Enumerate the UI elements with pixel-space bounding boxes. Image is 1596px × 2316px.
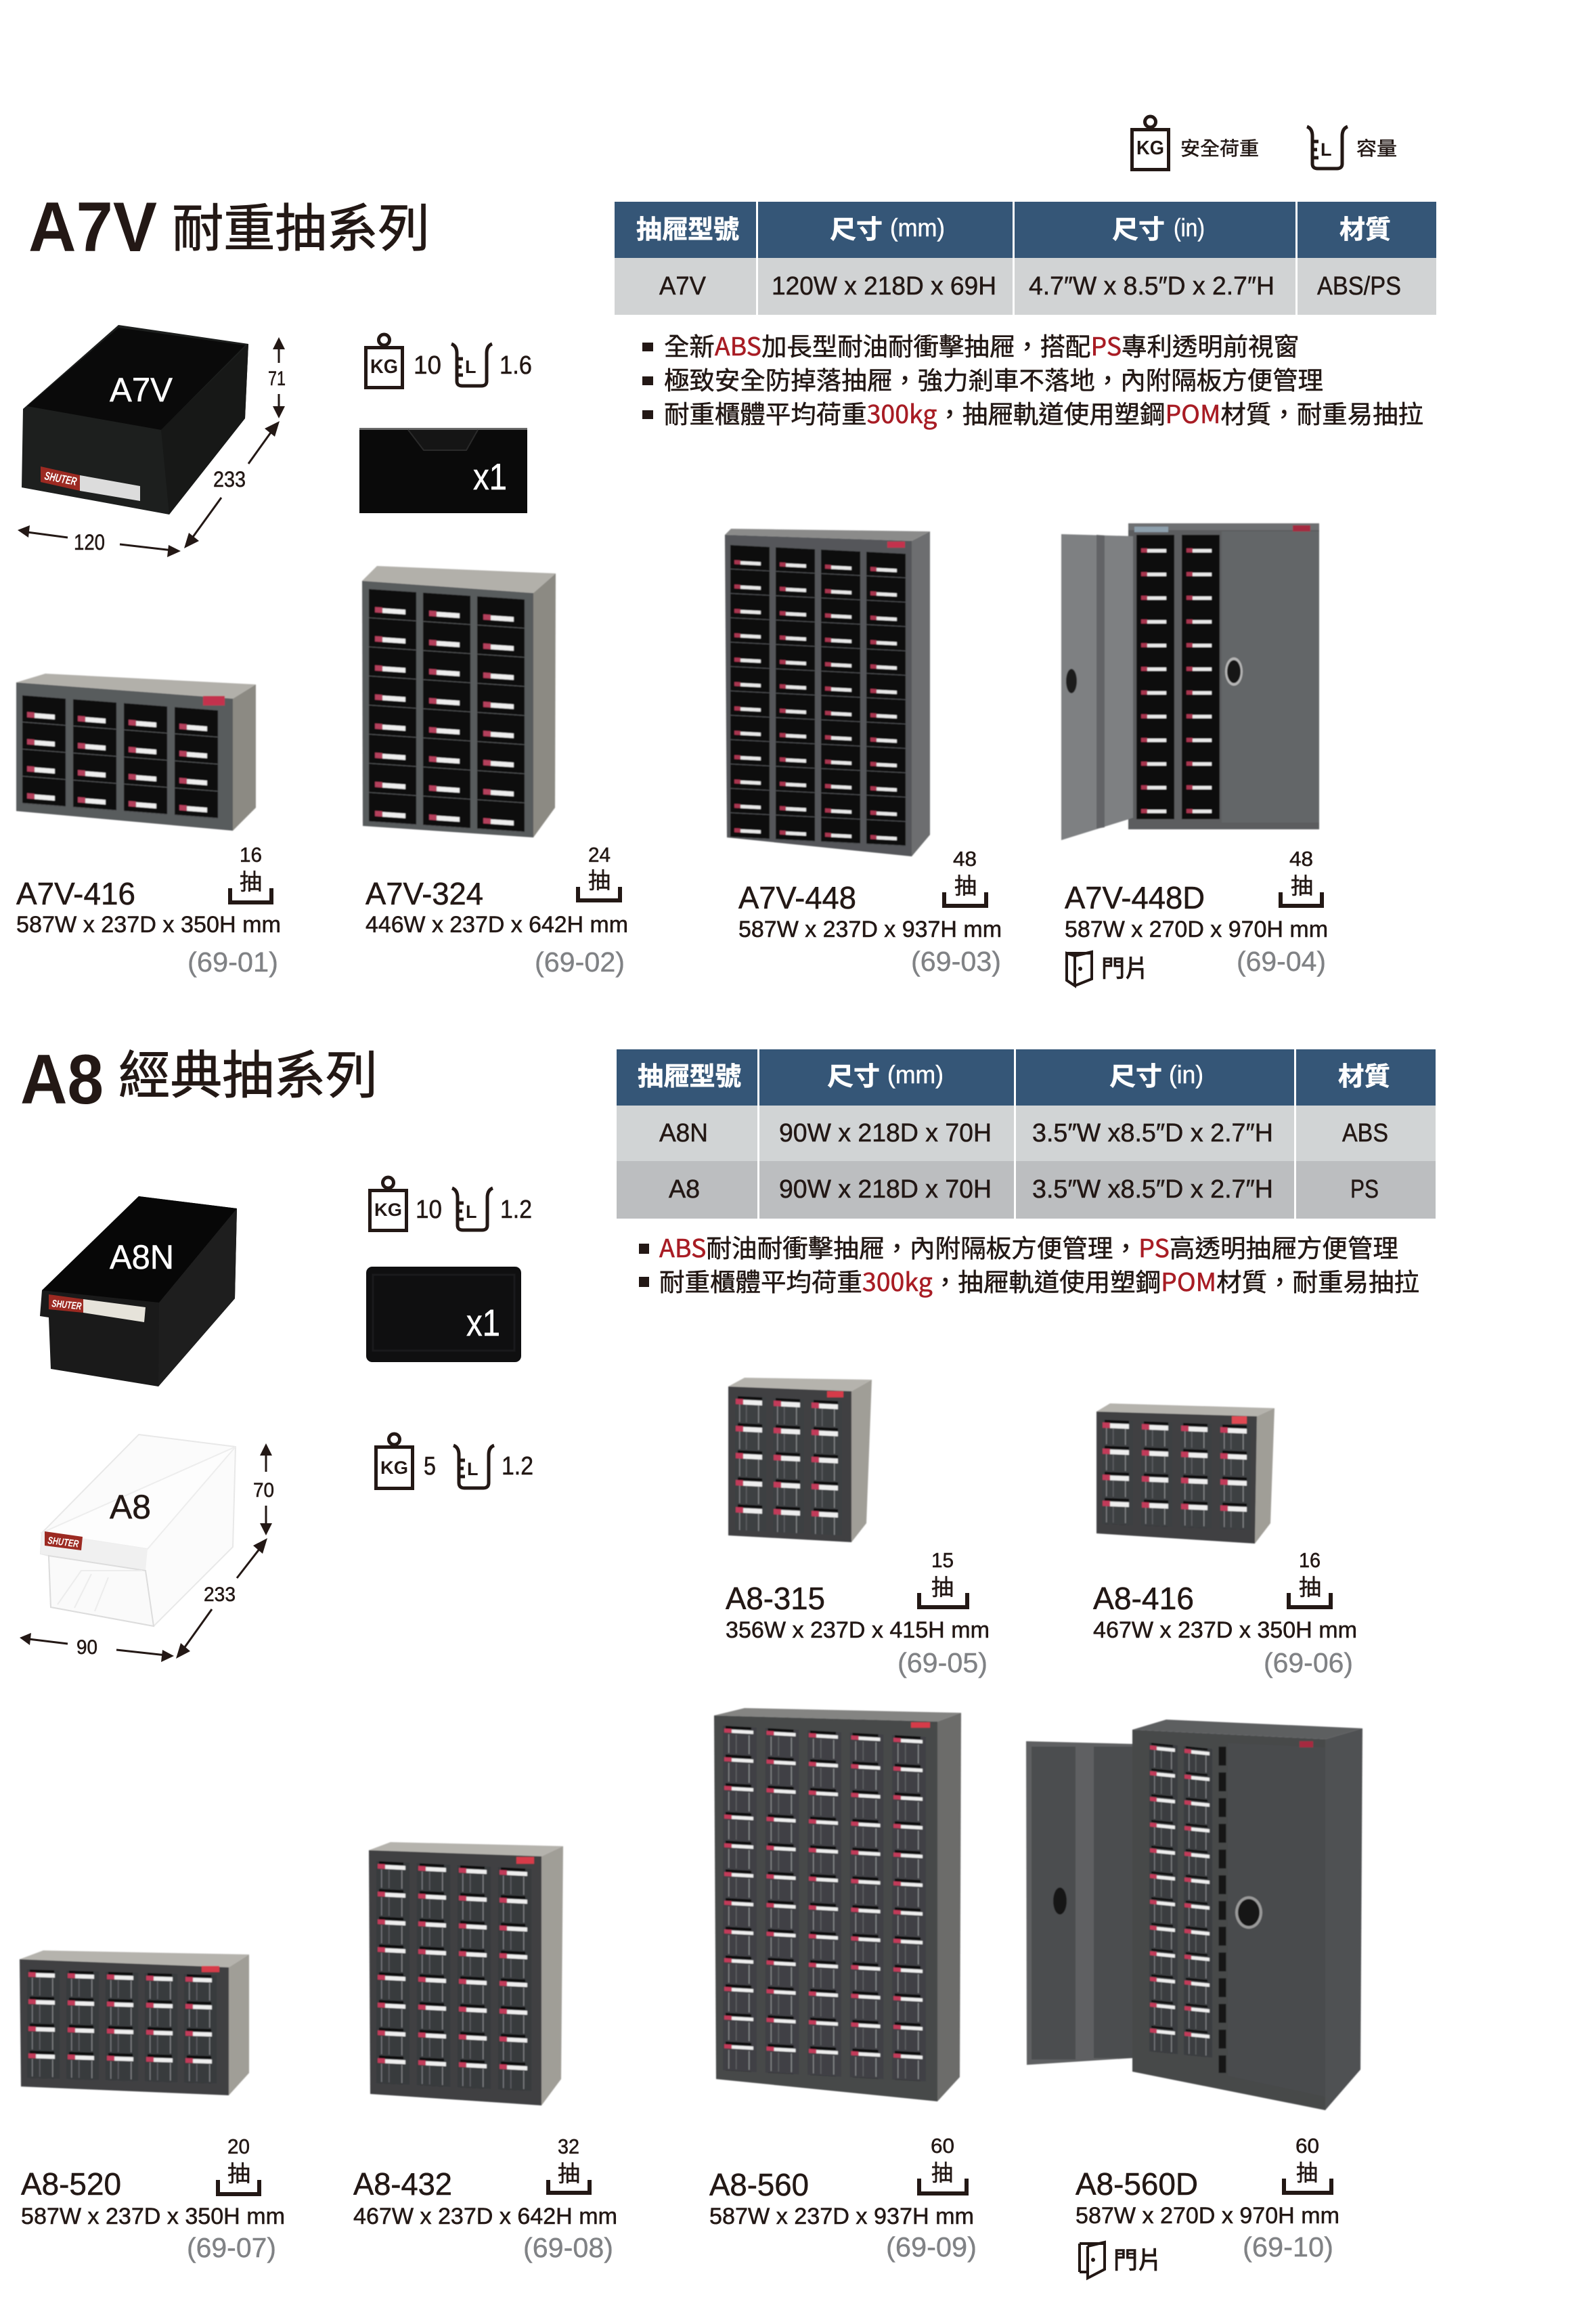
- icon: door: [1067, 952, 1092, 986]
- table: A8 specifications: 90W x 218D x 70H: [779, 1119, 992, 1148]
- A8 clear drawer with dimensions: [20, 1435, 274, 1662]
- dimension: depth 233: [184, 421, 280, 548]
- table: A8 specifications: 90W x 218D x 70H: [779, 1175, 992, 1204]
- A8 clear load and capacity: 1.2: [502, 1452, 533, 1481]
- caption: A8-560D: 587W x 270D x 970H mm: [1076, 2203, 1339, 2229]
- icon: capacity: L: [466, 1202, 476, 1222]
- caption: A7V-324: [365, 843, 628, 978]
- icon: tray: [230, 888, 271, 902]
- caption: A8-560D: 門片: [1113, 2242, 1162, 2276]
- icon: tray: [578, 887, 620, 900]
- title: A8 series: 經典抽系列: [118, 1034, 378, 1108]
- caption: A8-520: A8-520: [21, 2166, 121, 2202]
- table: A8 specifications: A8N: [659, 1119, 708, 1148]
- caption: A8-315: 抽: [931, 1569, 954, 1602]
- A8 clear drawer with dimensions: A8: [110, 1488, 151, 1526]
- icon: tray: [1284, 2179, 1331, 2193]
- cabinet: A8-560D with open door: [1026, 1720, 1362, 2110]
- caption: A8-315: 15: [931, 1548, 954, 1572]
- icon: load: KG: [374, 1200, 402, 1220]
- cabinet: A8-416: [1096, 1403, 1274, 1544]
- A8N load and capacity: 10: [416, 1196, 442, 1224]
- icon: capacity: L: [465, 357, 476, 377]
- icon: safe load: KG: [1136, 137, 1164, 159]
- A7V load and capacity: 1.6: [500, 351, 532, 380]
- table: A7V specifications: 抽屜型號: [636, 209, 739, 246]
- label: capacity: 容量: [1356, 134, 1397, 161]
- table: A8 specifications: ABS: [1342, 1119, 1388, 1148]
- icon: capacity: [453, 1445, 494, 1488]
- cabinet: A7V-416: [16, 674, 256, 831]
- caption: A8-520: [21, 2135, 285, 2263]
- A8 clear load and capacity: [376, 1434, 533, 1488]
- caption: A8-315: 356W x 237D x 415H mm: [726, 1617, 990, 1643]
- caption: A8-416: A8-416: [1093, 1581, 1194, 1616]
- title: A8 series: [20, 1034, 378, 1119]
- dimension: width 120: 120: [74, 530, 105, 554]
- table: A8 specifications: 3.5″W x8.5″D x 2.7″H: [1032, 1175, 1273, 1204]
- dimension: width 90: [20, 1633, 174, 1662]
- caption: A8-315: [726, 1548, 990, 1678]
- cabinet: A7V-324: [362, 566, 556, 837]
- caption: A8-416: 16: [1299, 1548, 1321, 1572]
- caption: A8-560: (69-09): [886, 2231, 977, 2263]
- table: A7V specifications: 120W x 218D x 69H: [772, 272, 996, 301]
- icon: capacity: [1307, 127, 1348, 169]
- caption: A8-416: 抽: [1299, 1569, 1321, 1602]
- icon: tray: [548, 2180, 590, 2193]
- caption: A7V-448D: 48: [1289, 847, 1313, 871]
- title: A8 series: A8: [20, 1041, 104, 1119]
- caption: A7V-416: 587W x 237D x 350H mm: [16, 912, 281, 938]
- dimension: height 70: 70: [253, 1479, 274, 1502]
- caption: A7V-448: 587W x 237D x 937H mm: [738, 917, 1002, 942]
- caption: A8-560: 抽: [931, 2155, 953, 2187]
- A8N load and capacity: 1.2: [500, 1196, 532, 1224]
- caption: A8-416: [1093, 1548, 1357, 1678]
- table: A8 specifications: 抽屜型號: [638, 1055, 741, 1093]
- caption: A8-560D: A8-560D: [1076, 2166, 1198, 2202]
- cabinet: A8-560: [714, 1708, 961, 2101]
- caption: A7V-448D: [1065, 847, 1328, 986]
- table: A7V specifications: 尺寸: [1112, 209, 1165, 246]
- label: safe load: 安全荷重: [1180, 134, 1259, 161]
- feature list: A8: [639, 1228, 1419, 1298]
- table: A7V specifications: ABS/PS: [1317, 272, 1401, 301]
- A8N black drawer: SHUTER: [51, 1298, 82, 1313]
- caption: A7V-416: 抽: [240, 864, 262, 896]
- caption: A8-432: 抽: [558, 2156, 580, 2188]
- icon: tray: [1281, 892, 1322, 906]
- feature list: A7V: 極致安全防掉落抽屜，強力剎車不落地，內附隔板方便管理: [664, 360, 1323, 397]
- A8 divider x1: x1: [466, 1301, 500, 1344]
- caption: A7V-324: 抽: [588, 862, 611, 895]
- caption: A8-520: (69-07): [187, 2232, 276, 2263]
- closed door: [1228, 1743, 1325, 2097]
- caption: A8-432: 467W x 237D x 642H mm: [353, 2204, 617, 2229]
- caption: A8-560: 60: [931, 2134, 954, 2158]
- A8N load and capacity: [370, 1177, 532, 1231]
- caption: A7V-448D: (69-04): [1237, 946, 1326, 977]
- icon: tray: [218, 2180, 259, 2194]
- dimension: depth 233: 233: [204, 1583, 236, 1606]
- icon: capacity: L: [467, 1459, 478, 1479]
- caption: A8-416: (69-06): [1264, 1647, 1353, 1678]
- caption: A8-560: A8-560: [709, 2167, 809, 2202]
- table: A7V specifications: (in): [1174, 214, 1205, 242]
- dimension: depth 233: 233: [213, 467, 246, 491]
- A8 divider x1: [366, 1267, 521, 1362]
- caption: A8-432: A8-432: [353, 2166, 452, 2202]
- caption: A8-560D: 抽: [1296, 2155, 1318, 2187]
- table: A7V specifications: [615, 202, 1436, 315]
- A7V divider x1: x1: [473, 456, 507, 498]
- icon: load: [365, 334, 402, 387]
- cabinet: A7V-448D with open door: [1061, 523, 1319, 840]
- icon: load: [376, 1434, 413, 1488]
- open door: [1026, 1741, 1132, 2065]
- caption: A7V-416: (69-01): [187, 946, 278, 978]
- cabinet: A7V-448: [725, 529, 930, 856]
- table: A8 specifications: (mm): [887, 1061, 944, 1089]
- caption: A8-520: 587W x 237D x 350H mm: [21, 2204, 285, 2229]
- open door: [1061, 534, 1133, 840]
- cabinet: A8-315: [728, 1378, 872, 1542]
- caption: A7V-448: A7V-448: [738, 880, 856, 915]
- dimension: depth 233: [176, 1538, 267, 1659]
- table: A8 specifications: PS: [1350, 1175, 1379, 1204]
- A7V drawer with dimensions: SHUTER: [43, 469, 78, 488]
- table: A8 specifications: [617, 1049, 1436, 1219]
- caption: A7V-416: [16, 843, 281, 978]
- table: A8 specifications: 材質: [1338, 1055, 1390, 1093]
- caption: A8-416: 467W x 237D x 350H mm: [1093, 1617, 1357, 1643]
- A8 clear load and capacity: 5: [424, 1452, 436, 1481]
- table: A8 specifications: (in): [1169, 1061, 1203, 1089]
- caption: A8-560: [709, 2134, 977, 2263]
- icon: capacity: [451, 344, 492, 386]
- dimension: width 90: 90: [76, 1636, 97, 1659]
- caption: A7V-416: 16: [240, 843, 262, 867]
- caption: A7V-448D: 抽: [1291, 868, 1313, 900]
- table: A7V specifications: (mm): [890, 214, 945, 242]
- table: A8 specifications: 尺寸: [827, 1055, 880, 1093]
- cabinet: A8-432: [369, 1842, 563, 2105]
- caption: A7V-324: (69-02): [535, 946, 625, 978]
- dimension: height 70: [253, 1443, 274, 1535]
- table: A8 specifications: A8: [669, 1175, 700, 1204]
- caption: A7V-324: 446W x 237D x 642H mm: [365, 912, 628, 938]
- caption: A8-520: 抽: [227, 2156, 250, 2188]
- icon: safe load: [1132, 116, 1168, 169]
- icon: tray: [919, 2179, 967, 2193]
- feature list: A8: ABS耐油耐衝擊抽屜，內附隔板方便管理， PS高透明抽屜方便管理: [659, 1228, 1398, 1265]
- caption: A7V-448D: A7V-448D: [1065, 880, 1205, 915]
- caption: A7V-448: (69-03): [911, 946, 1001, 977]
- caption: A7V-324: A7V-324: [365, 876, 483, 911]
- dimension: height 71: 71: [268, 368, 286, 390]
- A8 clear drawer with dimensions: SHUTER: [47, 1535, 79, 1550]
- caption: A7V-448: [738, 847, 1002, 977]
- icon: tray: [919, 1593, 967, 1607]
- icon: capacity: [452, 1188, 493, 1230]
- A7V divider x1: [359, 428, 527, 513]
- table: A7V specifications: 材質: [1339, 209, 1391, 246]
- A7V load and capacity: 10: [414, 351, 441, 380]
- A7V drawer with dimensions: [18, 325, 286, 557]
- caption: A8-432: [353, 2135, 617, 2263]
- table: A8 specifications: 尺寸: [1109, 1055, 1162, 1093]
- icon: load: KG: [370, 356, 398, 378]
- caption: A8-560: 587W x 237D x 937H mm: [709, 2204, 974, 2229]
- feature list: A8: 耐重櫃體平均荷重300kg，抽屜軌道使用塑鋼POM材質，耐重易抽拉: [659, 1262, 1419, 1298]
- feature list: A7V: [642, 326, 1423, 431]
- closed door: [1222, 531, 1319, 823]
- dimension: width 120: [18, 525, 181, 557]
- caption: A8-315: A8-315: [726, 1581, 825, 1616]
- caption: A8-432: 32: [558, 2135, 579, 2158]
- caption: A8-315: (69-05): [897, 1647, 988, 1678]
- caption: A8-432: (69-08): [523, 2232, 613, 2263]
- title: A7V series: 耐重抽系列: [172, 187, 430, 261]
- caption: A7V-448: 抽: [954, 868, 977, 900]
- table: A7V specifications: 4.7″W x 8.5″D x 2.7″H: [1029, 272, 1274, 301]
- table: A7V specifications: A7V: [659, 272, 707, 301]
- caption: A7V-324: 24: [588, 843, 611, 867]
- title: A7V series: [28, 187, 430, 267]
- cabinet: A8-520: [20, 1950, 249, 2095]
- A8N black drawer: [40, 1196, 237, 1386]
- caption: A7V-448D: 587W x 270D x 970H mm: [1065, 917, 1328, 942]
- caption: A7V-448D: 門片: [1101, 950, 1149, 984]
- icon: tray: [944, 892, 986, 906]
- caption: A8-560D: (69-10): [1243, 2231, 1333, 2263]
- caption: A8-520: 20: [227, 2135, 250, 2158]
- legend: safe load and capacity icons: [1132, 116, 1397, 169]
- A7V load and capacity: [365, 334, 532, 387]
- A7V drawer with dimensions: A7V: [110, 371, 173, 409]
- dimension: height 71: [268, 337, 286, 418]
- icon: load: [370, 1177, 406, 1231]
- feature list: A7V: 耐重櫃體平均荷重300kg，抽屜軌道使用塑鋼POM材質，耐重易抽拉: [664, 394, 1423, 431]
- feature list: A7V: 全新ABS加長型耐油耐衝擊抽屜，搭配PS專利透明前視窗: [664, 326, 1299, 363]
- A8N black drawer: A8N: [110, 1238, 174, 1276]
- table: A7V specifications: 尺寸: [830, 209, 883, 246]
- table: A8 specifications: 3.5″W x8.5″D x 2.7″H: [1032, 1119, 1273, 1148]
- icon: tray: [1289, 1593, 1331, 1607]
- icon: capacity: L: [1321, 139, 1332, 160]
- caption: A8-560D: 60: [1295, 2134, 1319, 2158]
- caption: A8-560D: [1076, 2134, 1339, 2278]
- caption: A7V-416: A7V-416: [16, 876, 135, 911]
- title: A7V series: A7V: [28, 188, 157, 267]
- icon: door: [1080, 2242, 1105, 2278]
- icon: load: KG: [380, 1458, 408, 1478]
- caption: A7V-448: 48: [953, 847, 977, 871]
